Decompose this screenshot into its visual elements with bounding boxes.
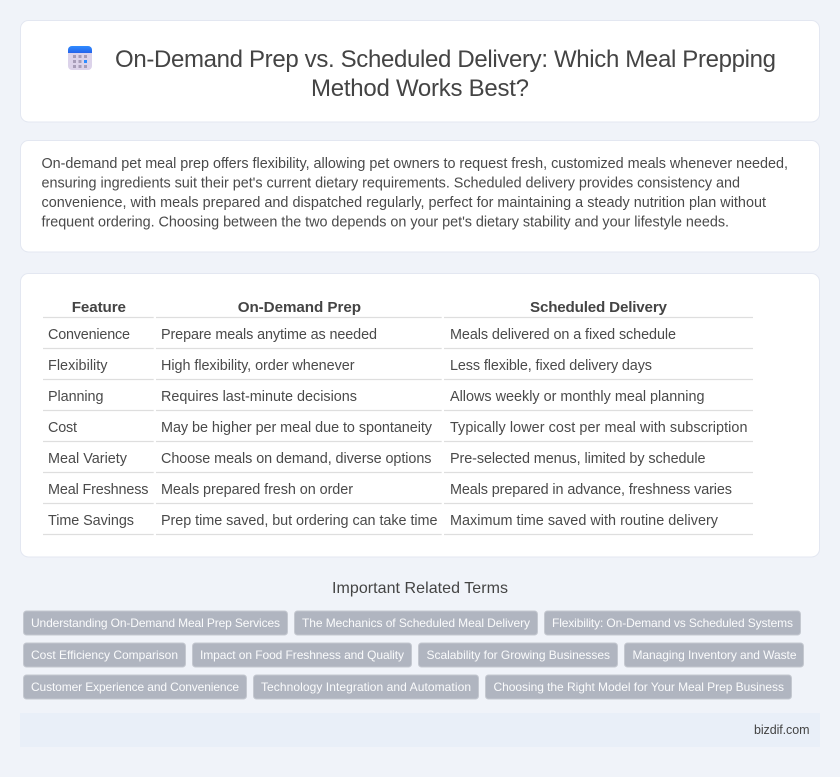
title [115,46,776,102]
text block: intro: ensuring ingredients suit their pet's current dietary requirements. Scheduled delivery provides consistency and [42,176,740,192]
table header: Scheduled Delivery [530,299,668,316]
text block: intro [42,156,788,230]
row: meal variety [48,451,706,467]
tag [254,675,478,699]
panel: intro paragraph [20,140,820,252]
title: On-Demand Prep vs. Scheduled Delivery: Which Meal Prepping [115,46,776,73]
tag: Choosing the Right Model for Your Meal Prep Business [494,680,784,694]
tag [192,643,412,667]
row: cost: May be higher per meal due to spontaneity [161,420,433,436]
row: meal variety: Pre-selected menus, limited by schedule [450,451,706,467]
tag [624,643,804,667]
tag: Understanding On-Demand Meal Prep Services [31,616,280,630]
tag [418,643,618,667]
row: flexibility [48,358,652,374]
row: flexibility: Flexibility [48,358,108,374]
row: cost: Typically lower cost per meal with subscription [450,420,748,436]
tag list: related terms [24,611,804,699]
row: flexibility: High flexibility, order whenever [161,358,355,374]
text block: intro: frequent ordering. Choosing between the two depends on your pet's dietary stability and your lifestyle needs. [42,214,729,230]
row: planning: Allows weekly or monthly meal planning [450,389,704,405]
tag: Cost Efficiency Comparison [31,648,178,662]
row: time savings [48,513,719,529]
row: meal variety: Meal Variety [48,451,128,467]
row: planning [48,389,704,405]
row: time savings: Maximum time saved with routine delivery [450,513,719,529]
row: time savings: Time Savings [48,513,134,529]
panel: comparison table [20,274,820,557]
row: cost: Cost [48,420,77,436]
tag: Impact on Food Freshness and Quality [200,648,404,662]
row: convenience: Meals delivered on a fixed schedule [450,327,676,343]
tag: Flexibility: On-Demand vs Scheduled Systems [552,616,793,630]
tag [24,643,186,667]
footer bar [20,713,820,747]
tag: Technology Integration and Automation [261,680,471,694]
text block: intro: On-demand pet meal prep offers flexibility, allowing pet owners to request fresh, customized meals whenever needed, [42,156,788,172]
tag [24,675,246,699]
table header [72,299,668,316]
footer bar: bizdif.com [754,723,810,737]
tag: Customer Experience and Convenience [31,680,239,694]
row: cost [48,420,748,436]
title: Method Works Best? [311,75,529,102]
tag: Scalability for Growing Businesses [426,648,610,662]
tag [544,611,800,635]
row: flexibility: Less flexible, fixed delivery days [450,358,652,374]
heading: related terms: Important Related Terms [332,580,508,597]
tag [24,611,288,635]
icon: calendar [68,46,92,70]
row: meal freshness [48,482,732,498]
tag: The Mechanics of Scheduled Meal Delivery [302,616,530,630]
tag [294,611,538,635]
row: meal variety: Choose meals on demand, diverse options [161,451,432,467]
row: meal freshness: Meals prepared in advance, freshness varies [450,482,732,498]
panel: title card [20,20,820,122]
row: meal freshness: Meals prepared fresh on order [161,482,353,498]
text block: intro: convenience, with meals prepared and dispatched regularly, perfect for maintaining a steady nutrition plan without [42,195,766,211]
row: convenience: Prepare meals anytime as needed [161,327,377,343]
tag [486,675,792,699]
row: convenience: Convenience [48,327,130,343]
row: meal freshness: Meal Freshness [48,482,148,498]
tag: Managing Inventory and Waste [632,648,797,662]
table header: Feature [72,299,126,316]
row: planning: Requires last-minute decisions [161,389,357,405]
table header: On-Demand Prep [238,299,361,316]
row: time savings: Prep time saved, but ordering can take time [161,513,438,529]
row: planning: Planning [48,389,104,405]
row: convenience [48,327,676,343]
